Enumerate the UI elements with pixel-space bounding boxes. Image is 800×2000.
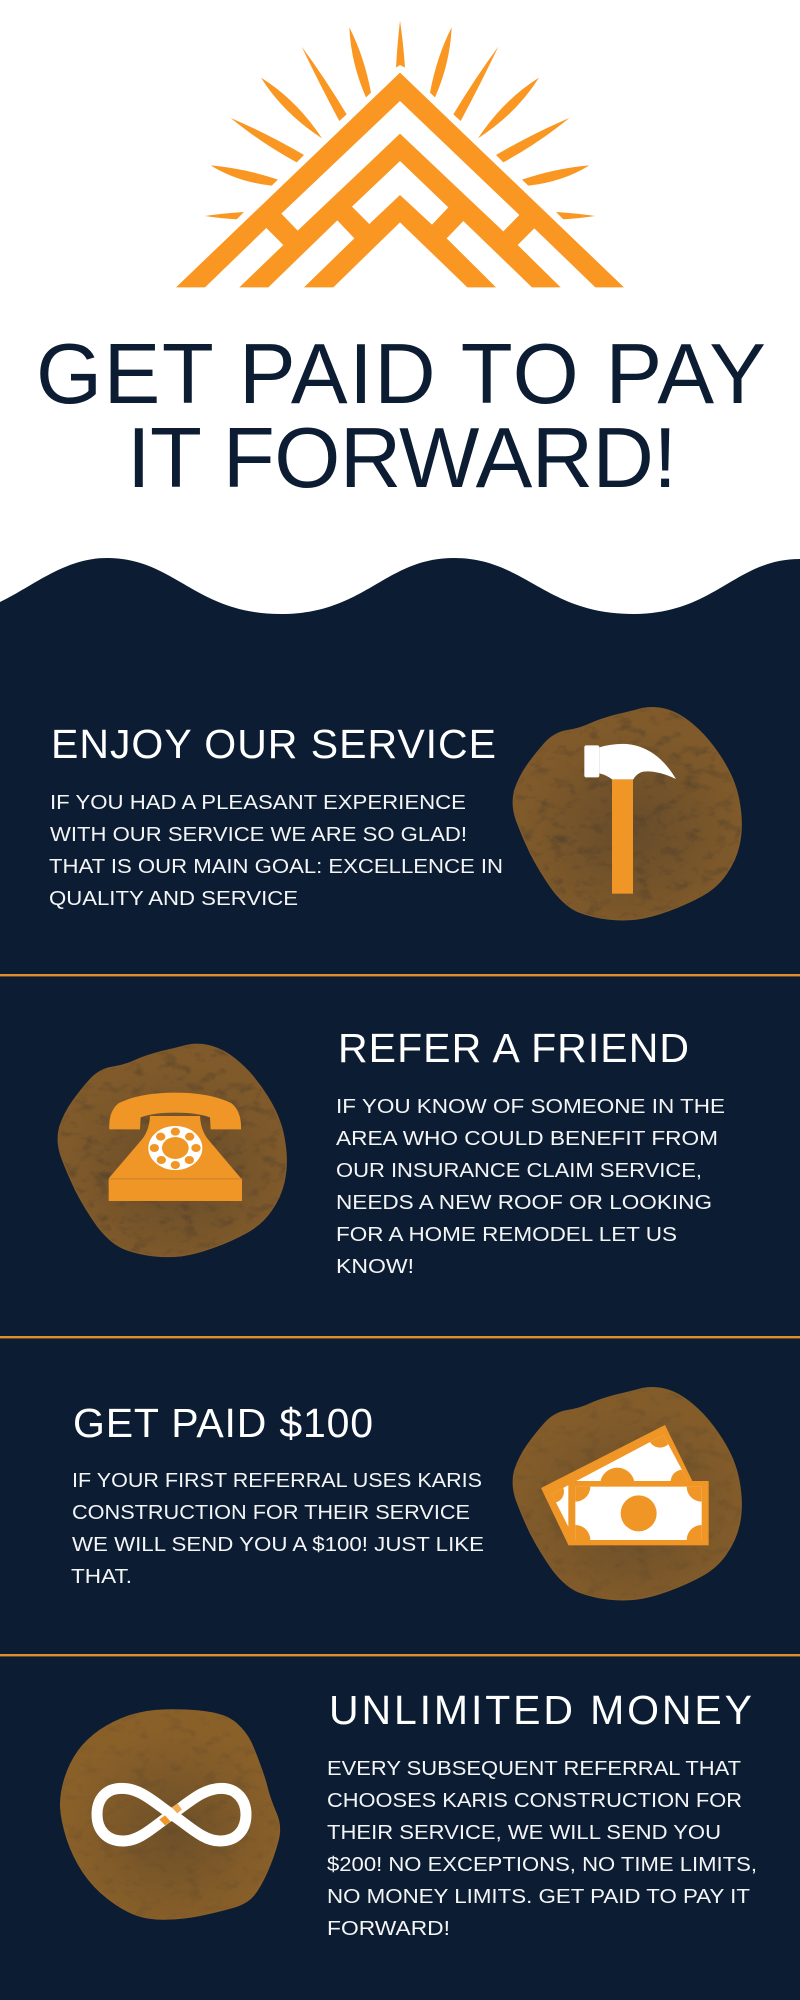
text: unlimited money body xyxy=(327,1757,757,1940)
title: GET PAID TO PAY xyxy=(36,327,766,422)
text: refer a friend body: NEEDS A NEW ROOF OR LOOKING xyxy=(336,1191,712,1214)
text: unlimited money body: $200! NO EXCEPTIONS, NO TIME LIMITS, xyxy=(327,1853,757,1876)
text: enjoy our service body: IF YOU HAD A PLEASANT EXPERIENCE xyxy=(50,791,466,814)
icon: money on blob xyxy=(514,1388,741,1599)
text: get paid body: CONSTRUCTION FOR THEIR SERVICE xyxy=(72,1501,470,1524)
text: refer a friend body: IF YOU KNOW OF SOMEONE IN THE xyxy=(336,1095,725,1118)
text: unlimited money body: NO MONEY LIMITS. GET PAID TO PAY IT xyxy=(327,1885,751,1908)
navy wave background xyxy=(0,558,800,2000)
divider 1 xyxy=(0,974,800,976)
logo roof xyxy=(176,73,624,287)
divider 2 xyxy=(0,1336,800,1338)
text: get paid body: IF YOUR FIRST REFERRAL USES KARIS xyxy=(72,1469,482,1492)
panel: refer a friend xyxy=(59,1025,725,1278)
panel: unlimited money xyxy=(61,1687,757,1940)
text: get paid body: WE WILL SEND YOU A $100! JUST LIKE xyxy=(72,1533,484,1556)
logo: roof with sun rays xyxy=(176,21,624,287)
text: enjoy our service body xyxy=(49,791,503,910)
text: enjoy our service body: WITH OUR SERVICE WE ARE SO GLAD! xyxy=(50,823,467,846)
title: IT FORWARD! xyxy=(127,411,677,506)
heading: unlimited money: UNLIMITED MONEY xyxy=(329,1687,752,1733)
text: refer a friend body: OUR INSURANCE CLAIM SERVICE, xyxy=(336,1159,702,1182)
text: refer a friend body: KNOW! xyxy=(336,1255,414,1278)
text: get paid body: THAT. xyxy=(71,1565,132,1588)
title xyxy=(36,327,766,506)
heading: enjoy our service: ENJOY OUR SERVICE xyxy=(51,721,496,767)
text: refer a friend body xyxy=(336,1095,725,1278)
text: enjoy our service body: QUALITY AND SERVICE xyxy=(49,887,298,910)
icon: infinity on blob xyxy=(61,1710,279,1919)
divider 3 xyxy=(0,1654,800,1656)
icon: telephone on blob xyxy=(59,1045,286,1256)
panel: get paid $100 xyxy=(71,1388,741,1599)
text: unlimited money body: FORWARD! xyxy=(327,1917,450,1940)
text: get paid body xyxy=(71,1469,484,1588)
heading: get paid $100: GET PAID $100 xyxy=(73,1400,373,1446)
icon: hammer on blob xyxy=(514,708,741,919)
logo rays xyxy=(205,21,595,219)
text: unlimited money body: EVERY SUBSEQUENT REFERRAL THAT xyxy=(327,1757,742,1780)
text: enjoy our service body: THAT IS OUR MAIN GOAL: EXCELLENCE IN xyxy=(49,855,503,878)
heading: refer a friend: REFER A FRIEND xyxy=(338,1025,689,1071)
panel: enjoy our service xyxy=(49,708,741,919)
text: refer a friend body: AREA WHO COULD BENEFIT FROM xyxy=(336,1127,718,1150)
text: refer a friend body: FOR A HOME REMODEL LET US xyxy=(336,1223,677,1246)
text: unlimited money body: THEIR SERVICE, WE WILL SEND YOU xyxy=(327,1821,721,1844)
text: unlimited money body: CHOOSES KARIS CONSTRUCTION FOR xyxy=(327,1789,742,1812)
